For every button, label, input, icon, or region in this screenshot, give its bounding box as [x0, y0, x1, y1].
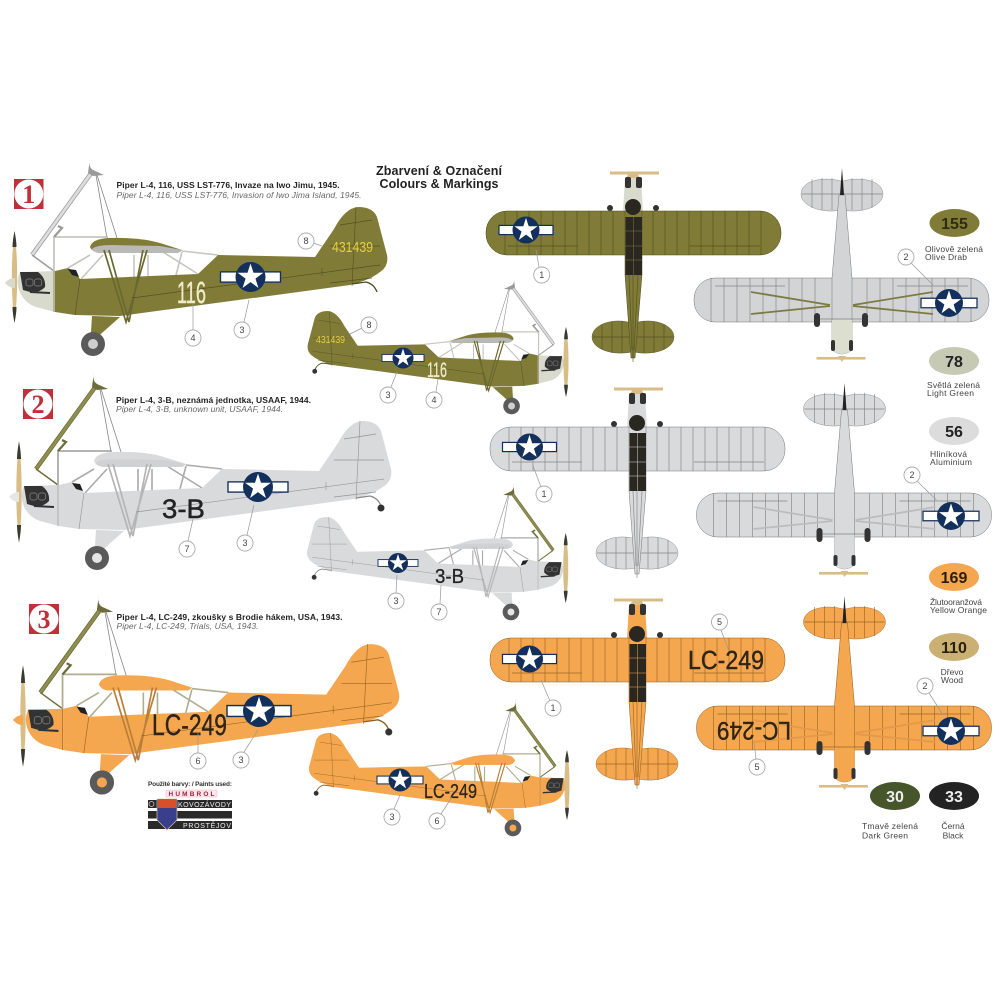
paint swatch 33: Black — [943, 830, 964, 840]
paint swatch 78 — [927, 347, 980, 398]
badge: profile 3 — [29, 604, 59, 634]
caption: profile 2: Piper L-4, 3-B, neznámá jednotka, USAAF, 1944. — [116, 395, 311, 405]
caption: profile 3 — [116, 612, 342, 631]
code LC-249: LC-249 — [424, 781, 477, 803]
paint swatch 30: Dark Green — [862, 830, 908, 840]
callout 2 — [904, 467, 936, 500]
insignia — [378, 553, 418, 573]
paint swatch 155: 155 — [941, 216, 968, 233]
callout 3: 3 — [389, 812, 395, 822]
callout 2 — [917, 678, 943, 715]
callout 5: 5 — [717, 617, 722, 627]
aircraft 3-B underside view — [696, 383, 992, 577]
paint swatch 30 — [862, 782, 920, 840]
aircraft: LC-249 left side view — [13, 595, 399, 795]
code LC-249 upside down: LC-249 — [717, 716, 791, 744]
callout 1: 1 — [541, 489, 547, 499]
insignia — [227, 695, 291, 727]
callout 2 — [898, 249, 933, 285]
paint swatch 110: Dřevo — [941, 667, 964, 677]
callout 3: 3 — [239, 325, 245, 335]
paint swatch 33: 33 — [945, 789, 963, 806]
paints used logo block: KOVOZÁVODY — [178, 800, 231, 809]
callout 5: 5 — [754, 762, 760, 772]
callout 7 — [179, 519, 195, 557]
paint swatch 56: 56 — [945, 424, 963, 441]
callout 7: 7 — [184, 544, 190, 554]
paint swatch 30: 30 — [886, 789, 904, 806]
callout 5 — [749, 742, 765, 775]
spinner — [5, 278, 15, 288]
callout 5 — [712, 614, 729, 650]
callout 7 — [431, 585, 447, 620]
callout 6: 6 — [195, 756, 201, 766]
paints used logo block: PROSTĚJOV — [183, 821, 231, 830]
insignia — [502, 434, 556, 460]
callout 3 — [384, 795, 400, 825]
paint swatch 155: Olivově zelená — [925, 244, 983, 254]
callout 1 — [534, 250, 550, 283]
code LC-249: LC-249 — [688, 645, 764, 675]
caption: profile 1: Piper L-4, 116, USS LST-776, Invaze na Iwo Jimu, 1945. — [116, 180, 340, 190]
paint swatch 78: Light Green — [927, 388, 974, 398]
serial number: 431439 — [332, 239, 373, 256]
aircraft 116 underside view — [694, 168, 989, 362]
paint swatch 169: 169 — [941, 570, 967, 587]
spinner — [13, 715, 23, 725]
badge: profile 2: 2 — [32, 390, 44, 419]
caption: profile 2 — [116, 395, 311, 414]
aircraft: LC-249 right side view — [309, 699, 570, 836]
callout 8: 8 — [303, 236, 309, 246]
insignia — [502, 646, 556, 672]
callout 3 — [237, 505, 254, 551]
callout 2: 2 — [922, 681, 928, 691]
paint swatch 169 — [929, 563, 987, 615]
insignia — [499, 216, 553, 244]
callout 3 — [233, 730, 258, 768]
callout 6: 6 — [434, 816, 440, 826]
callout 1: 1 — [539, 270, 544, 280]
paint swatch 78: 78 — [945, 354, 963, 371]
insignia — [923, 502, 979, 530]
insignia — [382, 348, 424, 368]
aircraft LC-249 top view — [490, 598, 785, 789]
serial number: 431439 — [316, 334, 345, 346]
caption: profile 3: Piper L-4, LC-249, zkoušky s Brodie hákem, USA, 1943. — [116, 612, 342, 622]
aircraft LC-249 underside view — [696, 596, 992, 790]
callout 4: 4 — [431, 395, 437, 405]
callout 1 — [532, 464, 552, 502]
callout 2: 2 — [909, 470, 915, 480]
insignia — [923, 717, 979, 745]
paints used logo block — [148, 781, 232, 830]
callout 1 — [541, 680, 561, 716]
aircraft: 116 left side view — [5, 158, 387, 356]
callout 3: 3 — [385, 390, 391, 400]
aircraft 116 top view — [486, 172, 781, 362]
code 116: 116 — [177, 275, 206, 310]
caption: profile 1: Piper L-4, 116, USS LST-776, Invasion of Iwo Jima Island, 1945. — [116, 190, 362, 200]
callout 3: 3 — [238, 755, 244, 765]
callout 4: 4 — [190, 333, 196, 343]
callout 2: 2 — [903, 252, 909, 262]
paint swatch 33 — [929, 782, 979, 840]
paint swatch 169: Yellow Orange — [930, 605, 987, 615]
code 3-B: 3-B — [162, 494, 205, 524]
insignia — [228, 472, 288, 502]
aircraft: 3-B right side view — [307, 483, 568, 620]
callout 4 — [185, 303, 201, 346]
paint swatch 56: Hliníková — [930, 449, 967, 459]
paint swatch 56: Aluminium — [930, 457, 972, 467]
aircraft: 3-B left side view — [9, 372, 391, 570]
callout 1: 1 — [550, 703, 556, 713]
badge: profile 3: 3 — [38, 605, 50, 634]
badge: profile 1: 1 — [22, 180, 35, 209]
paint swatch 30: Tmavě zelená — [862, 821, 918, 831]
callout 3: 3 — [393, 596, 399, 606]
callout 7: 7 — [436, 607, 442, 617]
title — [376, 164, 503, 191]
badge: profile 1 — [14, 179, 44, 209]
aircraft 3-B top view — [490, 388, 785, 578]
paint swatch 155 — [925, 209, 983, 262]
callout 4 — [426, 379, 442, 408]
paints used logo block: Použité barvy: / Paints used: — [148, 781, 232, 788]
paint swatch 33: Černá — [941, 821, 965, 831]
callout 3 — [380, 372, 397, 403]
callout 8: 8 — [366, 320, 372, 330]
paint swatch 78: Světlá zelená — [927, 380, 980, 390]
paint swatch 110: 110 — [941, 640, 967, 657]
paint swatch 110: Wood — [941, 675, 963, 685]
spinner — [9, 492, 19, 502]
code 116: 116 — [427, 359, 447, 382]
caption: profile 2: Piper L-4, 3-B, unknown unit, USAAF, 1944. — [116, 404, 283, 414]
insignia — [220, 262, 280, 292]
paint swatch 56 — [929, 417, 979, 467]
callout 6 — [190, 733, 206, 769]
callout 6 — [429, 797, 452, 829]
code 3-B: 3-B — [435, 566, 464, 588]
caption: profile 1 — [116, 180, 362, 200]
paint swatch 110 — [929, 633, 979, 685]
code LC-249: LC-249 — [152, 709, 227, 742]
callout 3 — [234, 300, 250, 338]
paint swatch 155: Olive Drab — [925, 252, 967, 262]
title: Zbarvení & Označení — [376, 164, 503, 178]
callout 8 — [350, 317, 377, 334]
callout 8 — [298, 233, 322, 249]
badge: profile 2 — [23, 389, 53, 419]
callout 3 — [388, 575, 404, 609]
title: Colours & Markings — [380, 177, 499, 191]
paint swatch 169: Žlutooranžová — [930, 597, 982, 607]
aircraft: 116 right side view — [308, 277, 569, 414]
insignia — [921, 289, 977, 317]
callout 3: 3 — [242, 538, 248, 548]
insignia — [377, 768, 423, 792]
paints used logo block: HUMBROL — [168, 791, 215, 798]
caption: profile 3: Piper L-4, LC-249, Trials, USA, 1943. — [116, 621, 258, 631]
